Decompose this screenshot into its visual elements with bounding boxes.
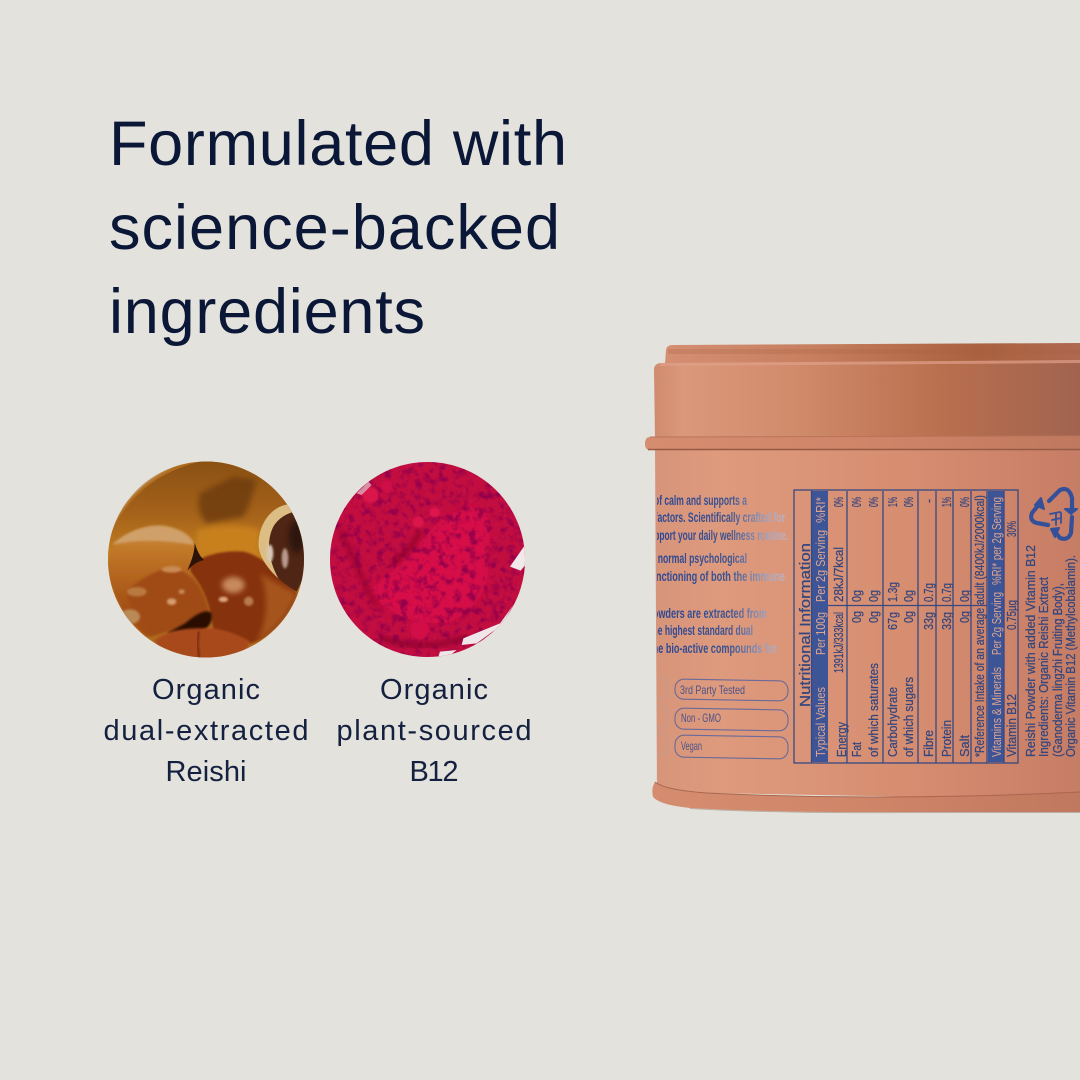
tin label: description text: es to normal psychological bbox=[635, 550, 747, 566]
table nutrient rows: 0g bbox=[902, 590, 916, 602]
powder lumps bbox=[363, 487, 379, 503]
right cap bbox=[269, 510, 304, 592]
powder central patch bbox=[370, 507, 490, 623]
table nutrient rows: 0% bbox=[867, 497, 881, 507]
table nutrient rows: 1% bbox=[940, 497, 954, 507]
dark crack bbox=[167, 611, 212, 633]
table nutrient rows: 0g bbox=[867, 611, 881, 623]
title: science-backed bbox=[109, 193, 560, 263]
table reference intake note: *Reference Intake of an average adult (8400kJ/2000kcal) bbox=[973, 495, 987, 757]
table vitamins header: Per 2g Serving bbox=[990, 592, 1004, 655]
table nutrient rows: Carbohydrate bbox=[886, 687, 900, 757]
table nutrient rows: 33g bbox=[922, 612, 936, 630]
table blue bands bbox=[812, 491, 828, 762]
tin base rim bbox=[652, 782, 1080, 812]
lower lobes bbox=[154, 626, 250, 658]
tin lid top bbox=[665, 343, 1080, 364]
ingredient label: reishi: Organic bbox=[152, 674, 260, 706]
table nutrient rows: of which sugars bbox=[902, 677, 916, 757]
ingredient label: B12: Organic bbox=[380, 674, 488, 706]
tin body bbox=[655, 449, 1080, 800]
tin label: ingredients text: Reishi Powder with added Vitamin B12 bbox=[1024, 545, 1038, 757]
product tin bbox=[645, 343, 1080, 813]
table header row: Typical Values bbox=[814, 687, 828, 757]
table header row: Per 2g Serving bbox=[814, 530, 828, 602]
table nutrient rows: Fibre bbox=[922, 730, 936, 757]
upper mushroom cap bbox=[107, 461, 300, 563]
table nutrient rows: 1.3g bbox=[886, 582, 900, 602]
table header row: Per 100g bbox=[814, 612, 828, 655]
tin label: certification pills bbox=[657, 678, 788, 759]
lower left lobe bbox=[127, 569, 210, 637]
powder shadows bbox=[393, 530, 420, 563]
table nutrient rows: 0g bbox=[850, 611, 864, 623]
ingredient label: reishi: dual-extracted bbox=[104, 715, 308, 747]
table nutrient rows: Fat bbox=[850, 742, 864, 757]
tin lid body bbox=[654, 361, 1080, 439]
table nutrient rows: of which saturates bbox=[867, 663, 881, 757]
table nutrient rows bbox=[832, 497, 972, 757]
tin label: description text: ic powders are extracted from bbox=[637, 605, 767, 621]
tin label: ingredients text bbox=[1024, 545, 1078, 757]
ingredient label: B12: plant-sourced bbox=[336, 715, 532, 747]
tin label: description text: ve the bio-active compounds for bbox=[637, 640, 777, 656]
table nutrient rows: 0% bbox=[832, 497, 846, 507]
tin label: description text: une factors. Scientifically crafted for bbox=[637, 509, 785, 525]
nutrition table bbox=[794, 490, 1019, 763]
tin label: description text: ng the highest standard dual bbox=[637, 622, 753, 638]
table header row: %RI* bbox=[814, 497, 828, 523]
table vitamin B12 row: Vitamin B12 bbox=[1005, 694, 1019, 757]
ingredient label: B12: B12 bbox=[410, 756, 458, 788]
table nutrient rows: 1% bbox=[886, 497, 900, 507]
table vitamins header: %RI* per 2g Serving bbox=[990, 497, 1004, 585]
table nutrient rows: 0g bbox=[958, 590, 972, 602]
tin label: description text: nse of calm and supports a bbox=[637, 492, 747, 508]
ingredient label: reishi: Reishi bbox=[166, 756, 246, 788]
pill: vegan: Vegan bbox=[681, 739, 702, 753]
tin label: description text bbox=[657, 495, 788, 656]
table vitamins header: Vitamins & Minerals bbox=[990, 667, 1004, 757]
table heading: Nutritional Information bbox=[797, 543, 814, 707]
table nutrient rows: 28kJ/7kcal bbox=[832, 547, 846, 602]
ingredient: reishi photo bbox=[107, 460, 310, 663]
table nutrient rows: 0g bbox=[867, 590, 881, 602]
table header row bbox=[814, 497, 828, 757]
ingredient: B12 powder photo bbox=[330, 461, 527, 658]
table vitamin B12 row: 30% bbox=[1005, 521, 1019, 537]
centre lobe bbox=[187, 551, 297, 643]
tin label: ingredients text: (Ganoderma lingzhi Fruiting Body), bbox=[1051, 583, 1065, 757]
title bbox=[109, 109, 567, 347]
pill: non-GMO: Non - GMO bbox=[681, 711, 721, 725]
icon: recycling symbol bbox=[1031, 489, 1077, 539]
table nutrient rows: 0g bbox=[850, 590, 864, 602]
tin label: ingredients text: Organic Vitamin B12 (Methylcobalamin). bbox=[1064, 555, 1078, 757]
table vitamins header bbox=[990, 497, 1004, 757]
tin label: description text: al functioning of both the immune bbox=[637, 568, 785, 584]
ingredient label: reishi bbox=[104, 674, 308, 788]
tin label: ingredients text: Ingredients: Organic Reishi Extract bbox=[1037, 577, 1051, 757]
ingredient label: B12 bbox=[336, 674, 532, 788]
table nutrient rows: 0% bbox=[958, 497, 972, 507]
table nutrient rows: Protein bbox=[940, 720, 954, 757]
table nutrient rows: 0g bbox=[958, 611, 972, 623]
table vitamin B12 row: 0.75µg bbox=[1005, 600, 1019, 630]
table nutrient rows: 1391kJ/333kcal bbox=[832, 612, 846, 673]
table nutrient rows: 0g bbox=[902, 611, 916, 623]
pill: 3rd party tested: 3rd Party Tested bbox=[680, 683, 745, 697]
left cap bbox=[108, 524, 194, 637]
table nutrient rows: - bbox=[922, 499, 936, 503]
table nutrient rows: 0% bbox=[902, 497, 916, 507]
table nutrient rows: Energy bbox=[835, 721, 849, 757]
table nutrient rows: 0% bbox=[850, 497, 864, 507]
table nutrient rows: 0.7g bbox=[940, 583, 954, 602]
table nutrient rows: Salt bbox=[958, 734, 972, 757]
table nutrient rows: 67g bbox=[886, 612, 900, 630]
tin lid rim bbox=[645, 436, 1080, 450]
table vitamin B12 row bbox=[1005, 521, 1019, 757]
tin label: description text: d support your daily wellness routine. bbox=[637, 527, 788, 543]
title: ingredients bbox=[109, 277, 425, 347]
powder background gaps bbox=[510, 546, 525, 571]
title: Formulated with bbox=[109, 109, 567, 179]
table frame and grid bbox=[794, 490, 1018, 763]
table nutrient rows: 33g bbox=[940, 612, 954, 630]
table nutrient rows: 0.7g bbox=[922, 583, 936, 602]
